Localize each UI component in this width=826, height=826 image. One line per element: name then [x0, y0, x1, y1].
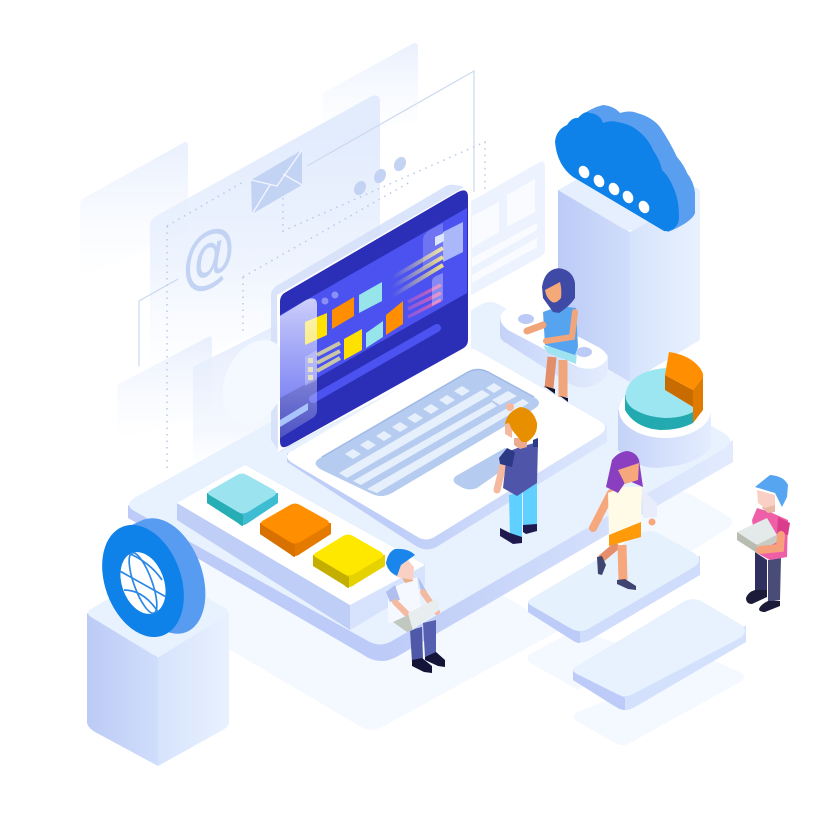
- connector lines: [139, 71, 485, 472]
- keyboard keys: [339, 383, 529, 493]
- panel: translucent overlays on screen: [280, 222, 463, 438]
- button: teal: [207, 474, 278, 526]
- platform: stepping pad two: [573, 599, 746, 710]
- person: man holding a box: [737, 475, 790, 612]
- button: yellow: [313, 534, 385, 588]
- panel: laptop base: [287, 349, 607, 550]
- column: cloud server: [558, 150, 700, 382]
- icon: cloud: [555, 105, 695, 232]
- platform: main base: [128, 302, 733, 661]
- platform: woman pedestal: [500, 307, 608, 388]
- person: woman in purple hair: [593, 451, 657, 590]
- screen coloured tiles: [305, 282, 403, 360]
- screen text lines: [317, 248, 443, 371]
- chart: isometric pie: [625, 352, 703, 430]
- globe grid: [120, 552, 166, 614]
- background floating panels: [80, 43, 545, 472]
- keyboard: [316, 370, 539, 496]
- person: sitting man with laptop: [386, 549, 445, 673]
- icon: three dots: [352, 155, 408, 197]
- column: globe pedestal: [87, 572, 229, 766]
- icon: at sign: @: [182, 212, 234, 303]
- chart: pie pedestal: [618, 382, 711, 468]
- person: boy in orange hair: [497, 403, 538, 544]
- button: orange: [260, 504, 331, 557]
- icon: translucent ellipse: [210, 330, 300, 434]
- faint floor shadows: [120, 492, 744, 745]
- platform: button tray: [177, 465, 425, 630]
- icon: envelope: [251, 150, 302, 214]
- panel: laptop lid back frame: [271, 185, 471, 452]
- panel: laptop screen: [280, 190, 468, 447]
- person: woman on pedestal: [527, 268, 578, 402]
- screen window dots: [322, 292, 338, 304]
- touchpad: [454, 448, 520, 490]
- icon: globe disc: [102, 518, 206, 637]
- platform: stepping pad one: [528, 531, 700, 643]
- isometric cloud computing illustration: [80, 43, 790, 766]
